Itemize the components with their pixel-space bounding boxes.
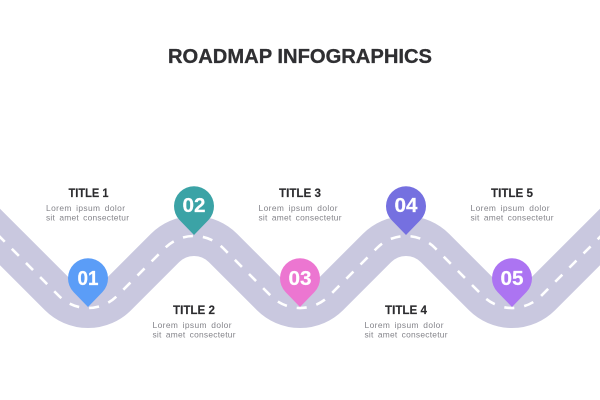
pin 02: 02 (182, 195, 206, 217)
text block: title 4: Lorem ipsum dolor (364, 320, 444, 330)
text block: title 5: Lorem ipsum dolor (470, 203, 550, 213)
text block: title 3 (258, 186, 342, 222)
pin 05: 05 (500, 268, 524, 290)
pin 04: 04 (394, 195, 418, 217)
road centre dashes (0, 217, 600, 308)
text block: title 2: TITLE 2 (173, 303, 215, 317)
pin 05 (492, 258, 532, 307)
pin 01 (68, 258, 108, 307)
text block: title 2 (152, 303, 236, 340)
text block: title 1: TITLE 1 (68, 186, 109, 200)
text block: title 1 (46, 186, 129, 222)
text block: title 2: sit amet consectetur (152, 330, 236, 340)
text block: title 4: TITLE 4 (385, 303, 427, 317)
pin 02 (174, 186, 214, 235)
title: ROADMAP INFOGRAPHICS (168, 46, 432, 68)
text block: title 5: TITLE 5 (491, 186, 533, 200)
text block: title 4: sit amet consectetur (364, 330, 448, 340)
text block: title 3: TITLE 3 (279, 186, 321, 200)
pin 03 (280, 258, 320, 307)
text block: title 1: Lorem ipsum dolor (46, 203, 125, 213)
text block: title 1: sit amet consectetur (46, 212, 129, 222)
road (0, 217, 600, 308)
text block: title 3: sit amet consectetur (258, 212, 342, 222)
text block: title 5 (470, 186, 554, 222)
text block: title 4 (364, 303, 448, 340)
pin 04 (386, 186, 426, 235)
text block: title 3: Lorem ipsum dolor (258, 203, 338, 213)
pin 01: 01 (78, 268, 98, 290)
text block: title 2: Lorem ipsum dolor (152, 320, 232, 330)
text block: title 5: sit amet consectetur (470, 212, 554, 222)
pin 03: 03 (288, 268, 312, 290)
